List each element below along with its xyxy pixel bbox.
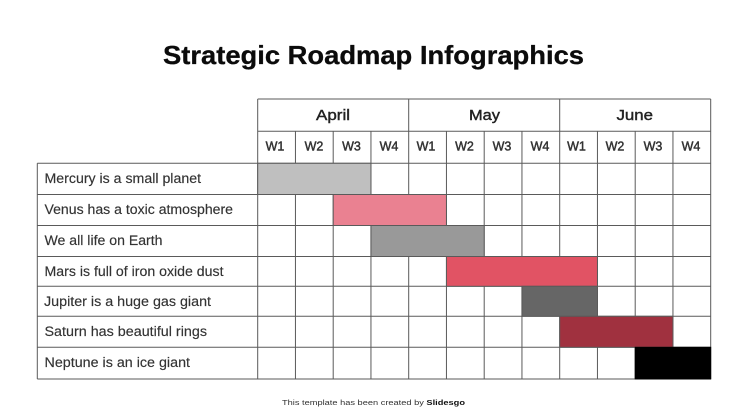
week headers: W1 — [417, 140, 435, 154]
week headers: W3 — [493, 140, 511, 154]
bar: Saturn — [560, 316, 673, 347]
week headers: W3 — [644, 140, 662, 154]
week headers: W2 — [305, 140, 323, 154]
gantt bars — [258, 163, 711, 379]
bar: Mars — [446, 256, 597, 286]
month headers — [316, 108, 653, 124]
row labels — [44, 171, 233, 370]
week headers: W2 — [455, 140, 474, 154]
week headers: W4 — [682, 140, 700, 154]
footer credit: This template has been created by Slidesgo — [282, 398, 465, 407]
month: May: May — [469, 108, 501, 124]
label: Saturn: Saturn has beautiful rings — [44, 324, 207, 339]
week headers: W4 — [380, 140, 398, 154]
gantt grid — [37, 99, 711, 379]
label: Mars: Mars is full of iron oxide dust — [44, 264, 224, 279]
week headers: W3 — [342, 140, 361, 154]
week headers: W4 — [531, 140, 549, 154]
bar: Venus — [333, 194, 446, 226]
label: Venus: Venus has a toxic atmosphere — [44, 202, 233, 217]
week headers: W1 — [567, 140, 586, 154]
week headers: W1 — [266, 140, 284, 154]
label: Earth: We all life on Earth — [44, 233, 162, 248]
label: Mercury: Mercury is a small planet — [44, 171, 201, 186]
bar: Neptune — [635, 347, 711, 379]
week headers: W2 — [606, 140, 624, 154]
month: April: April — [316, 108, 350, 124]
bar: Earth — [371, 226, 484, 256]
month: June: June — [616, 108, 653, 124]
label: Jupiter: Jupiter is a huge gas giant — [44, 294, 211, 309]
week headers — [266, 140, 700, 154]
title: Strategic Roadmap Infographics — [163, 40, 584, 70]
bar: Jupiter — [522, 286, 597, 316]
bar: Mercury — [258, 163, 371, 194]
label: Neptune: Neptune is an ice giant — [44, 355, 190, 370]
